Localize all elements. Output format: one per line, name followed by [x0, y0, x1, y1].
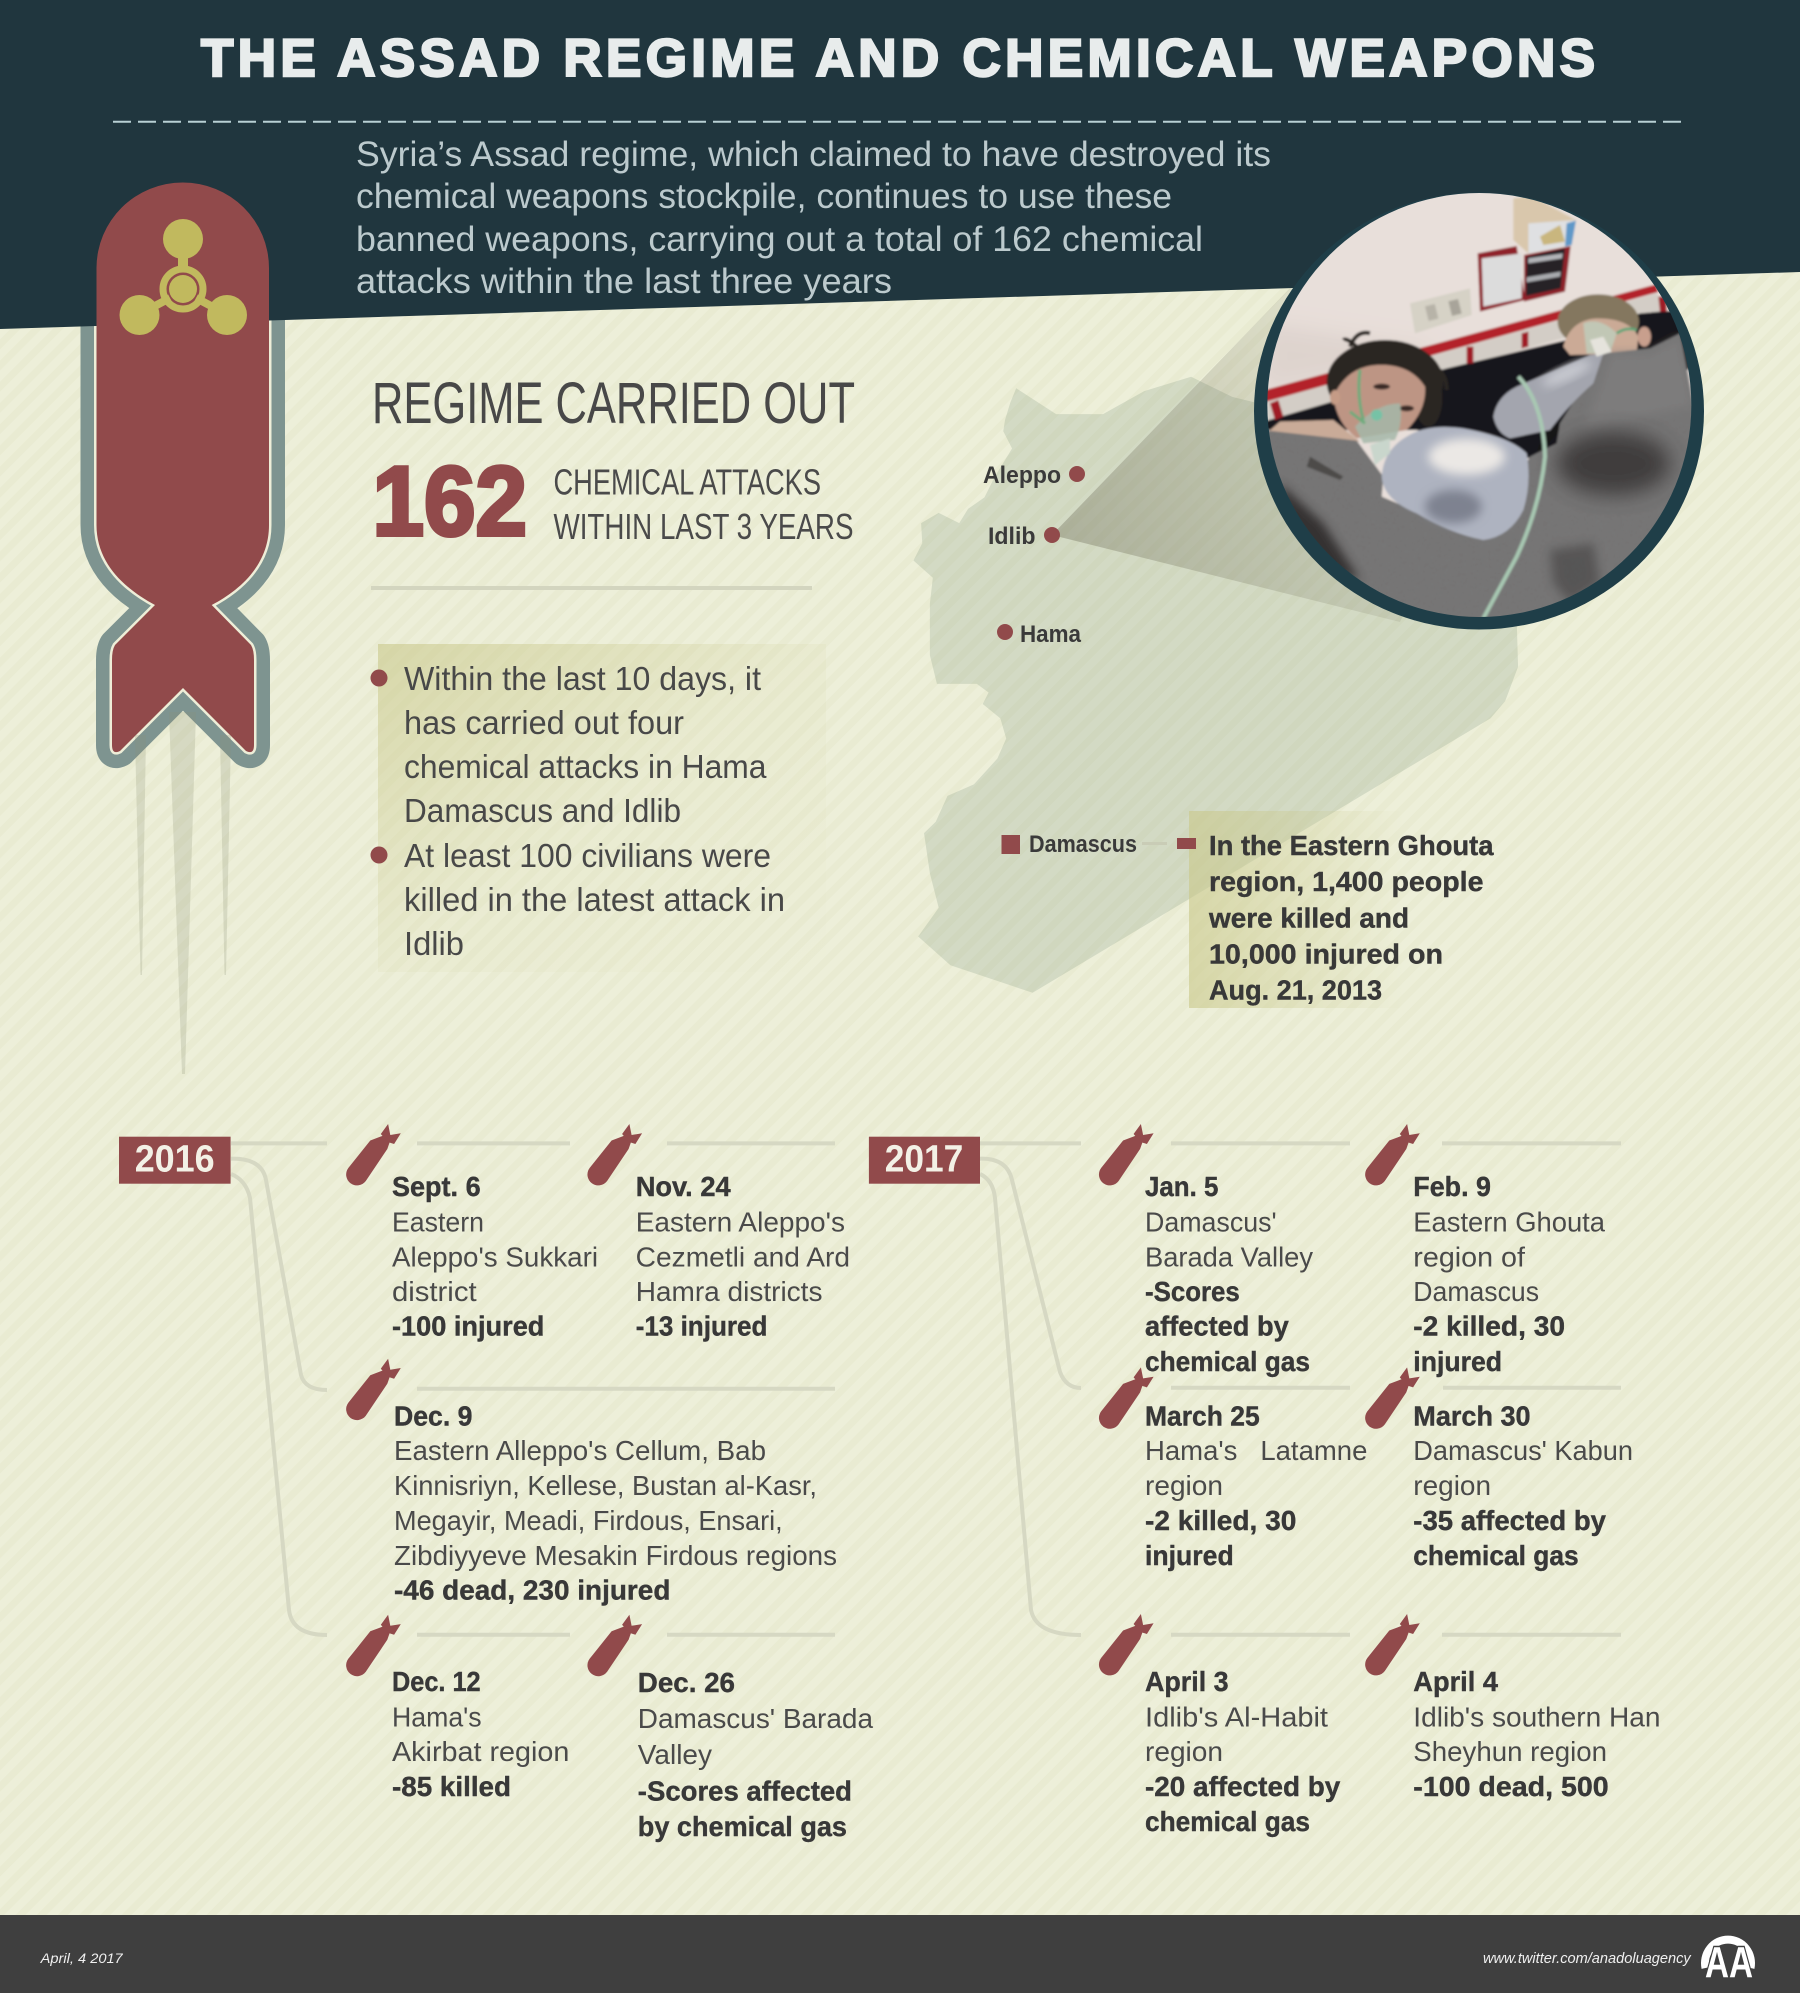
bullet two: Idlib: [404, 925, 464, 962]
girl mask: [1355, 403, 1401, 443]
bed mattress: [1263, 310, 1697, 463]
bullet two: [370, 837, 785, 962]
intro text: [356, 135, 1271, 301]
map labels: Hama: [1020, 621, 1082, 648]
callout: Eastern Ghouta: Aug. 21, 2013: [1209, 975, 1382, 1006]
bullet one: chemical attacks in Hama: [404, 748, 767, 785]
boy hair: [1556, 293, 1641, 339]
icon: AA logo: AA: [1705, 1938, 1753, 1987]
event: Dec. 12: [346, 1615, 569, 1802]
header band: [0, 0, 1800, 329]
event: Dec. 9: Dec. 9: [394, 1400, 472, 1432]
event: Dec. 9: [346, 1359, 837, 1606]
event: Dec. 12: Akirbat region: [392, 1736, 569, 1767]
event: Jan. 5: affected by: [1145, 1311, 1289, 1342]
connector lines: [980, 1143, 1621, 1635]
event: Jan. 5: chemical gas: [1145, 1346, 1310, 1377]
bullet one: [370, 660, 767, 829]
event: Feb. 9: Eastern Ghouta: [1413, 1207, 1605, 1238]
event: Dec. 26: Damascus' Barada: [638, 1703, 873, 1734]
bottle bag two: [1493, 353, 1603, 438]
panel: regime count: [372, 371, 855, 556]
event: March 30: -35 affected by: [1413, 1505, 1606, 1536]
event: Feb. 9: [1365, 1124, 1605, 1377]
event: Feb. 9: -2 killed, 30: [1413, 1311, 1565, 1342]
year badge 2016: 2016: [135, 1138, 215, 1180]
event: Dec. 9: Eastern Alleppo's Cellum, Bab: [394, 1435, 766, 1466]
footer: [0, 1915, 1800, 1993]
bomb illustration: [96, 182, 269, 1074]
event: Nov. 24: -13 injured: [636, 1311, 767, 1342]
bomb outline: [96, 182, 269, 752]
event: Feb. 9: region of: [1413, 1241, 1525, 1272]
event: Dec. 9: Zibdiyyeve Mesakin Firdous regions: [394, 1540, 837, 1571]
event: Feb. 9: Damascus: [1413, 1276, 1539, 1307]
event: Nov. 24: Nov. 24: [636, 1171, 731, 1202]
event: April 3: April 3: [1145, 1666, 1229, 1697]
map labels: Aleppo: [983, 462, 1061, 489]
event: Jan. 5: Jan. 5: [1145, 1171, 1218, 1202]
event: March 30: [1365, 1367, 1633, 1571]
event: March 25: -2 killed, 30: [1145, 1505, 1296, 1536]
panel: bullet list: [370, 644, 826, 972]
calendar card: [1478, 246, 1525, 312]
event: April 4: Sheyhun region: [1413, 1736, 1607, 1767]
number caption: WITHIN LAST 3 YEARS: [554, 506, 854, 547]
red rail: [1265, 284, 1658, 402]
event: April 3: region: [1145, 1736, 1223, 1767]
heading: REGIME CARRIED OUT: [372, 371, 855, 436]
girl face: [1333, 365, 1425, 438]
event: Sept. 6: district: [392, 1276, 477, 1307]
event: March 25: [1099, 1367, 1367, 1571]
callout: Eastern Ghouta: were killed and: [1208, 902, 1409, 934]
bottle bag one: [1382, 427, 1529, 540]
event: Nov. 24: Hamra districts: [636, 1276, 822, 1307]
boy face: [1563, 318, 1638, 355]
event: March 30: March 30: [1413, 1400, 1531, 1432]
intro text: chemical weapons stockpile, continues to use these: [356, 177, 1172, 216]
title: THE ASSAD REGIME AND CHEMICAL WEAPONS: [201, 29, 1595, 88]
bullet two: killed in the latest attack in: [404, 881, 785, 918]
event: Dec. 26: [587, 1615, 873, 1842]
intro text: Syria’s Assad regime, which claimed to have destroyed its: [356, 135, 1271, 174]
footer date: April, 4 2017: [40, 1950, 124, 1966]
event: Sept. 6: Eastern: [392, 1207, 484, 1238]
event: Dec. 9: Megayir, Meadi, Firdous, Ensari,: [394, 1505, 783, 1536]
event: Dec. 9: Kinnisriyn, Kellese, Bustan al-Kasr,: [394, 1470, 817, 1501]
event: Jan. 5: Damascus': [1145, 1207, 1277, 1238]
event: Dec. 26: Valley: [638, 1739, 712, 1770]
callout: Eastern Ghouta: [1177, 811, 1494, 1008]
number caption: CHEMICAL ATTACKS: [554, 462, 821, 502]
event: Dec. 9: -46 dead, 230 injured: [394, 1574, 670, 1606]
year badge 2017: [869, 1137, 980, 1184]
girl shoulder: [1268, 420, 1360, 442]
timeline 2017: [869, 1124, 1660, 1837]
year badge 2017: 2017: [885, 1138, 963, 1180]
event: Dec. 12: -85 killed: [392, 1771, 511, 1802]
map labels: Idlib: [988, 523, 1036, 550]
event: April 3: [1099, 1614, 1341, 1837]
event: April 4: Idlib's southern Han: [1413, 1702, 1660, 1732]
event: Jan. 5: [1099, 1124, 1313, 1377]
event: April 3: chemical gas: [1145, 1806, 1310, 1837]
event: Sept. 6: [346, 1124, 598, 1342]
event: March 25: injured: [1145, 1540, 1234, 1571]
event: Feb. 9: injured: [1413, 1346, 1502, 1377]
event: Dec. 26: -Scores affected: [638, 1776, 852, 1806]
event: March 25: Hama's Latamne: [1145, 1435, 1367, 1466]
event: Dec. 12: Hama's: [392, 1702, 482, 1732]
intro text: banned weapons, carrying out a total of 162 chemical: [356, 220, 1203, 259]
map labels: [983, 462, 1167, 858]
timeline 2016: [119, 1124, 873, 1842]
event: March 30: chemical gas: [1413, 1540, 1579, 1571]
event: Nov. 24: [587, 1124, 850, 1342]
bullet one: Within the last 10 days, it: [404, 660, 761, 697]
connector lines: [231, 1143, 835, 1635]
callout: Eastern Ghouta: In the Eastern Ghouta: [1209, 830, 1494, 861]
bullet two: At least 100 civilians were: [404, 837, 771, 874]
footer link: www.twitter.com/anadoluagency: [1483, 1950, 1692, 1967]
black card: [1524, 246, 1571, 302]
event: Dec. 12: Dec. 12: [392, 1666, 481, 1697]
event: April 4: April 4: [1413, 1666, 1498, 1697]
bomb body: [96, 182, 269, 752]
event: Jan. 5: Barada Valley: [1145, 1241, 1313, 1272]
event: Nov. 24: Cezmetli and Ard: [636, 1241, 850, 1272]
event: March 25: region: [1145, 1470, 1223, 1501]
event: Dec. 26: Dec. 26: [638, 1667, 735, 1698]
beam from Idlib to photo: [1052, 288, 1500, 622]
event: Sept. 6: Sept. 6: [392, 1171, 481, 1202]
event: March 25: March 25: [1145, 1400, 1260, 1432]
intro text: attacks within the last three years: [356, 262, 892, 301]
map of Syria: [913, 377, 1518, 993]
event: April 3: -20 affected by: [1145, 1771, 1341, 1802]
event: Dec. 26: by chemical gas: [638, 1811, 847, 1842]
event: Sept. 6: Aleppo's Sukkari: [392, 1241, 598, 1272]
under rail: [1267, 293, 1667, 420]
event: March 30: region: [1413, 1470, 1491, 1501]
event: March 30: Damascus' Kabun: [1413, 1435, 1633, 1466]
callout: Eastern Ghouta: region, 1,400 people: [1209, 866, 1484, 897]
map labels: Damascus: [1029, 831, 1137, 858]
girl hair: [1325, 338, 1444, 396]
number caption: [554, 462, 854, 547]
blanket: [1250, 333, 1697, 630]
envelope: [1513, 196, 1576, 253]
event: Jan. 5: -Scores: [1145, 1276, 1240, 1307]
event: Nov. 24: Eastern Aleppo's: [636, 1207, 845, 1238]
event: April 4: -100 dead, 500: [1413, 1771, 1609, 1802]
bullet one: Damascus and Idlib: [404, 792, 681, 829]
event: Sept. 6: -100 injured: [392, 1311, 544, 1342]
oxygen tube: [1483, 377, 1545, 618]
icon: chemical weapon symbol: [120, 219, 247, 335]
wall socket: [1410, 288, 1472, 333]
boy mask: [1583, 321, 1617, 353]
bullet one: has carried out four: [404, 704, 684, 741]
event: Feb. 9: Feb. 9: [1413, 1171, 1491, 1202]
bomb trails: [135, 712, 231, 1074]
blanket shadows: [1557, 432, 1670, 495]
year badge 2016: [119, 1137, 231, 1184]
number 162: 162: [372, 446, 527, 556]
event: April 3: Idlib's Al-Habit: [1145, 1702, 1328, 1732]
callout: Eastern Ghouta: 10,000 injured on: [1209, 939, 1443, 970]
photo: children receiving oxygen: [1250, 190, 1717, 630]
event: April 4: [1365, 1614, 1660, 1802]
